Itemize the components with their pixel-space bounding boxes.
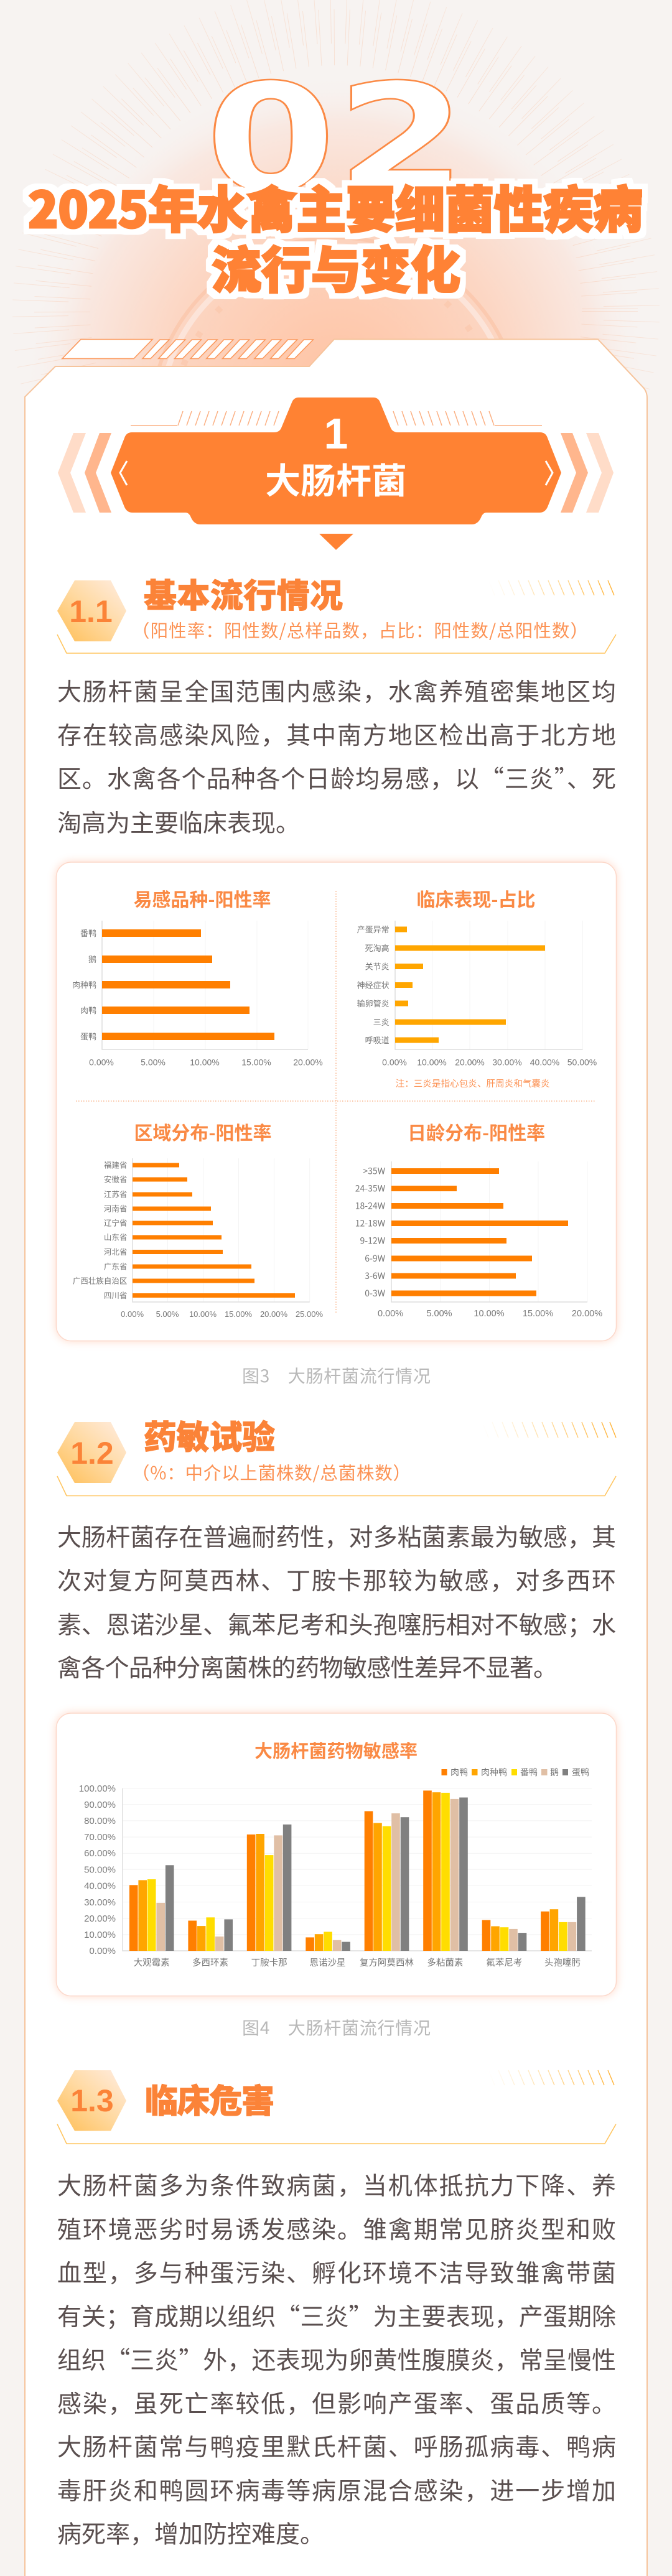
inner arrows [120,461,553,485]
hexagon badge [57,580,126,641]
chart: clinical signs [357,885,597,1090]
chart: age distribution: 3-6W [365,1270,385,1282]
chart: regional distribution: 安徽省 [104,1173,127,1184]
chart: regional distribution: 河北省 [104,1245,127,1257]
y axis labels: 30.00% [84,1897,116,1908]
text block 1.3: 有关；育成期以组织“三炎”为主要表现，产蛋期除 [57,2298,616,2333]
chart: susceptible breeds: 5.00% [141,1058,166,1067]
bars: 多西环素 [188,1917,233,1951]
chart: age distribution: 9-12W [360,1234,385,1247]
chart: regional distribution: 25.00% [296,1309,323,1319]
heading bracket [57,1476,616,1495]
chart: clinical signs: 20.00% [455,1058,485,1067]
right chevrons [561,433,614,513]
chart: susceptible breeds: 番鸭 [80,927,96,939]
chart: susceptible breeds: 15.00% [241,1058,271,1067]
chart: clinical signs: 临床表现-占比 [416,885,536,912]
y axis labels [79,1783,116,1956]
chart: susceptible breeds: 肉鸭 [80,1004,96,1016]
chart title: 大肠杆菌药物敏感率 [254,1737,418,1763]
heading text: 临床危害 [145,2075,274,2123]
chart: regional distribution: 20.00% [260,1309,287,1319]
chart: susceptible breeds: 易感品种-阳性率 [133,885,271,912]
chart: age distribution [355,1118,602,1319]
y axis labels: 100.00% [79,1783,116,1794]
section banner: 1 大肠杆菌 [58,398,614,524]
chart: clinical signs: 死淘高 [365,942,390,954]
heading bracket [57,635,616,653]
panel: drug sensitivity chart [56,1713,616,1996]
category labels: 恩诺沙星 [310,1956,346,1969]
decorative tab parallelograms [62,340,313,358]
bars: 氟苯尼考 [482,1920,526,1951]
bars: 头孢噻肟 [541,1897,586,1951]
section heading 1.3 [57,2070,616,2144]
legend: 肉种鸭 [481,1766,507,1779]
text block 1.3: 殖环境恶劣时易诱发感染。雏禽期常见脐炎型和败 [57,2211,616,2246]
legend: 番鸭 [520,1766,538,1779]
chart: regional distribution: 15.00% [225,1309,252,1319]
category labels: 多粘菌素 [427,1956,463,1969]
text block 1.3: 病死率，增加防控难度。 [57,2516,324,2550]
y axis labels: 10.00% [84,1930,116,1940]
y axis labels: 0.00% [89,1946,116,1956]
chart: regional distribution: 河南省 [104,1202,127,1214]
chart: regional distribution [73,1118,323,1319]
hexagon badge: 1.3 [70,2083,114,2118]
hexagon badge [57,2070,126,2131]
y axis labels: 50.00% [84,1865,116,1875]
category labels: 复方阿莫西林 [360,1956,414,1969]
chart: regional distribution: 江苏省 [104,1188,127,1199]
category labels [134,1956,581,1969]
legend: 鹅 [550,1766,559,1779]
chart: regional distribution: 广西壮族自治区 [73,1274,127,1286]
bars: 恩诺沙星 [306,1932,350,1951]
y axis labels: 90.00% [84,1800,116,1810]
text block 1.3: 血型，多与种蛋污染、孵化环境不洁导致雏禽带菌 [57,2254,616,2289]
chart: clinical signs: 三炎 [373,1016,390,1028]
text block 1.1: 区。水禽各个品种各个日龄均易感，以“三炎”、死 [57,760,616,795]
chart: age distribution: 10.00% [474,1309,505,1319]
chart: age distribution: 18-24W [355,1199,385,1212]
title [28,170,643,303]
chart: age distribution: 5.00% [426,1309,452,1319]
chart: regional distribution: 10.00% [189,1309,217,1319]
chart: clinical signs: 40.00% [530,1058,559,1067]
text block 1.1: 存在较高感染风险，其中南方地区检出高于北方地 [57,717,616,751]
chart: regional distribution: 5.00% [156,1309,179,1319]
text block 1.2 [57,1518,616,1684]
heading hatch [488,580,614,595]
section heading 1.2 [57,1411,616,1495]
banner shape [111,398,561,524]
hexagon badge: 1.2 [70,1436,114,1471]
text block 1.3: 大肠杆菌多为条件致病菌，当机体抵抗力下降、养 [57,2167,616,2202]
y axis labels: 70.00% [84,1832,116,1843]
chart: age distribution: 24-35W [355,1182,385,1194]
chart: age distribution: 6-9W [365,1252,385,1265]
chart: age distribution: 20.00% [572,1309,602,1319]
panel: prevalence charts [56,862,616,1341]
text block 1.3: 组织“三炎”外，还表现为卵黄性腹膜炎，常呈慢性 [57,2341,616,2376]
arrow down [319,534,353,550]
chart: regional distribution: 福建省 [104,1158,127,1171]
bars: 多粘菌素 [423,1790,468,1951]
chart: regional distribution: 山东省 [104,1230,127,1243]
text block 1.2: 大肠杆菌存在普遍耐药性，对多粘菌素最为敏感，其 [57,1518,616,1553]
legend: 蛋鸭 [572,1766,589,1779]
text block 1.3: 感染，虽死亡率较低，但影响产蛋率、蛋品质等。 [57,2385,616,2420]
chart: clinical signs: 输卵管炎 [357,997,390,1009]
text block 1.2: 素、恩诺沙星、氟苯尼考和头孢噻肟相对不敏感；水 [57,1606,616,1641]
big number 02: 02 [205,52,467,226]
left chevrons [58,433,111,513]
chart: clinical signs: 0.00% [382,1058,407,1067]
category labels: 大观霉素 [134,1956,170,1969]
text block 1.3: 大肠杆菌常与鸭疫里默氏杆菌、呼肠孤病毒、鸭病 [57,2429,616,2463]
chart: age distribution: 0-3W [365,1287,385,1300]
banner number: 1 [324,409,348,458]
chart note: 注：三炎是指心包炎、肝周炎和气囊炎 [396,1077,550,1090]
text block 1.1: 大肠杆菌呈全国范围内感染，水禽养殖密集地区均 [57,673,616,708]
bars: 大观霉素 [129,1865,174,1951]
heading hatch [488,2070,614,2085]
chart: age distribution: 15.00% [523,1309,553,1319]
chart: regional distribution: 广东省 [104,1260,127,1272]
text block 1.1: 淘高为主要临床表现。 [57,804,300,839]
chart: age distribution: >35W [363,1165,385,1177]
text block 1.2: 禽各个品种分离菌株的药物敏感性差异不显著。 [57,1649,558,1684]
chart: age distribution: 日龄分布-阳性率 [408,1118,545,1145]
chart: regional distribution: 四川省 [104,1289,127,1301]
chart: regional distribution: 0.00% [121,1309,144,1319]
chart: susceptible breeds: 10.00% [190,1058,220,1067]
chart: susceptible breeds [72,885,323,1067]
chart: clinical signs: 50.00% [567,1058,597,1067]
chart: susceptible breeds: 0.00% [89,1058,114,1067]
banner hairlines [131,411,542,425]
caption figure 3: 图3 大肠杆菌流行情况 [242,1363,431,1388]
bars: 丁胺卡那 [247,1825,291,1951]
chart: susceptible breeds: 蛋鸭 [80,1030,96,1042]
chart: regional distribution: 区域分布-阳性率 [134,1118,272,1145]
chart: clinical signs: 神经症状 [357,979,390,990]
title: 流行与变化 [212,231,460,303]
caption figure 4: 图4 大肠杆菌流行情况 [242,2015,431,2040]
y axis labels: 60.00% [84,1848,116,1859]
chart: susceptible breeds: 肉种鸭 [72,979,96,990]
y axis labels: 20.00% [84,1913,116,1924]
title: 2025年水禽主要细菌性疾病 [28,170,643,243]
category labels: 丁胺卡那 [251,1956,287,1969]
chart: clinical signs: 呼吸道 [365,1034,390,1046]
text block 1.3 [57,2167,616,2550]
chart: susceptible breeds: 鹅 [88,953,96,965]
chart: susceptible breeds: 20.00% [293,1058,323,1067]
y axis labels: 40.00% [84,1881,116,1891]
heading hatch [482,1422,616,1438]
chart: clinical signs: 10.00% [417,1058,447,1067]
text block 1.3: 毒肝炎和鸭圆环病毒等病原混合感染，进一步增加 [57,2472,616,2507]
chart: clinical signs: 30.00% [492,1058,522,1067]
chart: age distribution: 12-18W [355,1217,385,1229]
heading note: （%：中介以上菌株数/总菌株数） [132,1459,411,1485]
chart: clinical signs: 产蛋异常 [357,923,390,935]
chart: clinical signs: 关节炎 [365,960,390,972]
heading bracket [57,2124,616,2144]
heading note: （阳性率：阳性数/总样品数，占比：阳性数/总阳性数） [132,617,588,643]
text block 1.2: 次对复方阿莫西林、丁胺卡那较为敏感，对多西环 [57,1562,616,1597]
grid [123,1788,592,1935]
heading text: 药敏试验 [144,1411,275,1459]
category labels: 头孢噻肟 [544,1956,581,1969]
chart: regional distribution: 辽宁省 [104,1217,127,1228]
section heading 1.1 [57,570,616,653]
y axis labels: 80.00% [84,1816,116,1826]
category labels: 氟苯尼考 [486,1956,522,1969]
legend [442,1766,589,1779]
hexagon badge: 1.1 [69,594,113,629]
legend: 肉鸭 [450,1766,468,1779]
bars: 复方阿莫西林 [365,1811,409,1951]
category labels: 多西环素 [192,1956,228,1969]
chart: age distribution: 0.00% [378,1309,403,1319]
text block 1.1 [57,673,616,839]
hexagon badge [57,1422,126,1483]
heading text: 基本流行情况 [144,570,343,617]
banner title: 大肠杆菌 [265,453,407,504]
